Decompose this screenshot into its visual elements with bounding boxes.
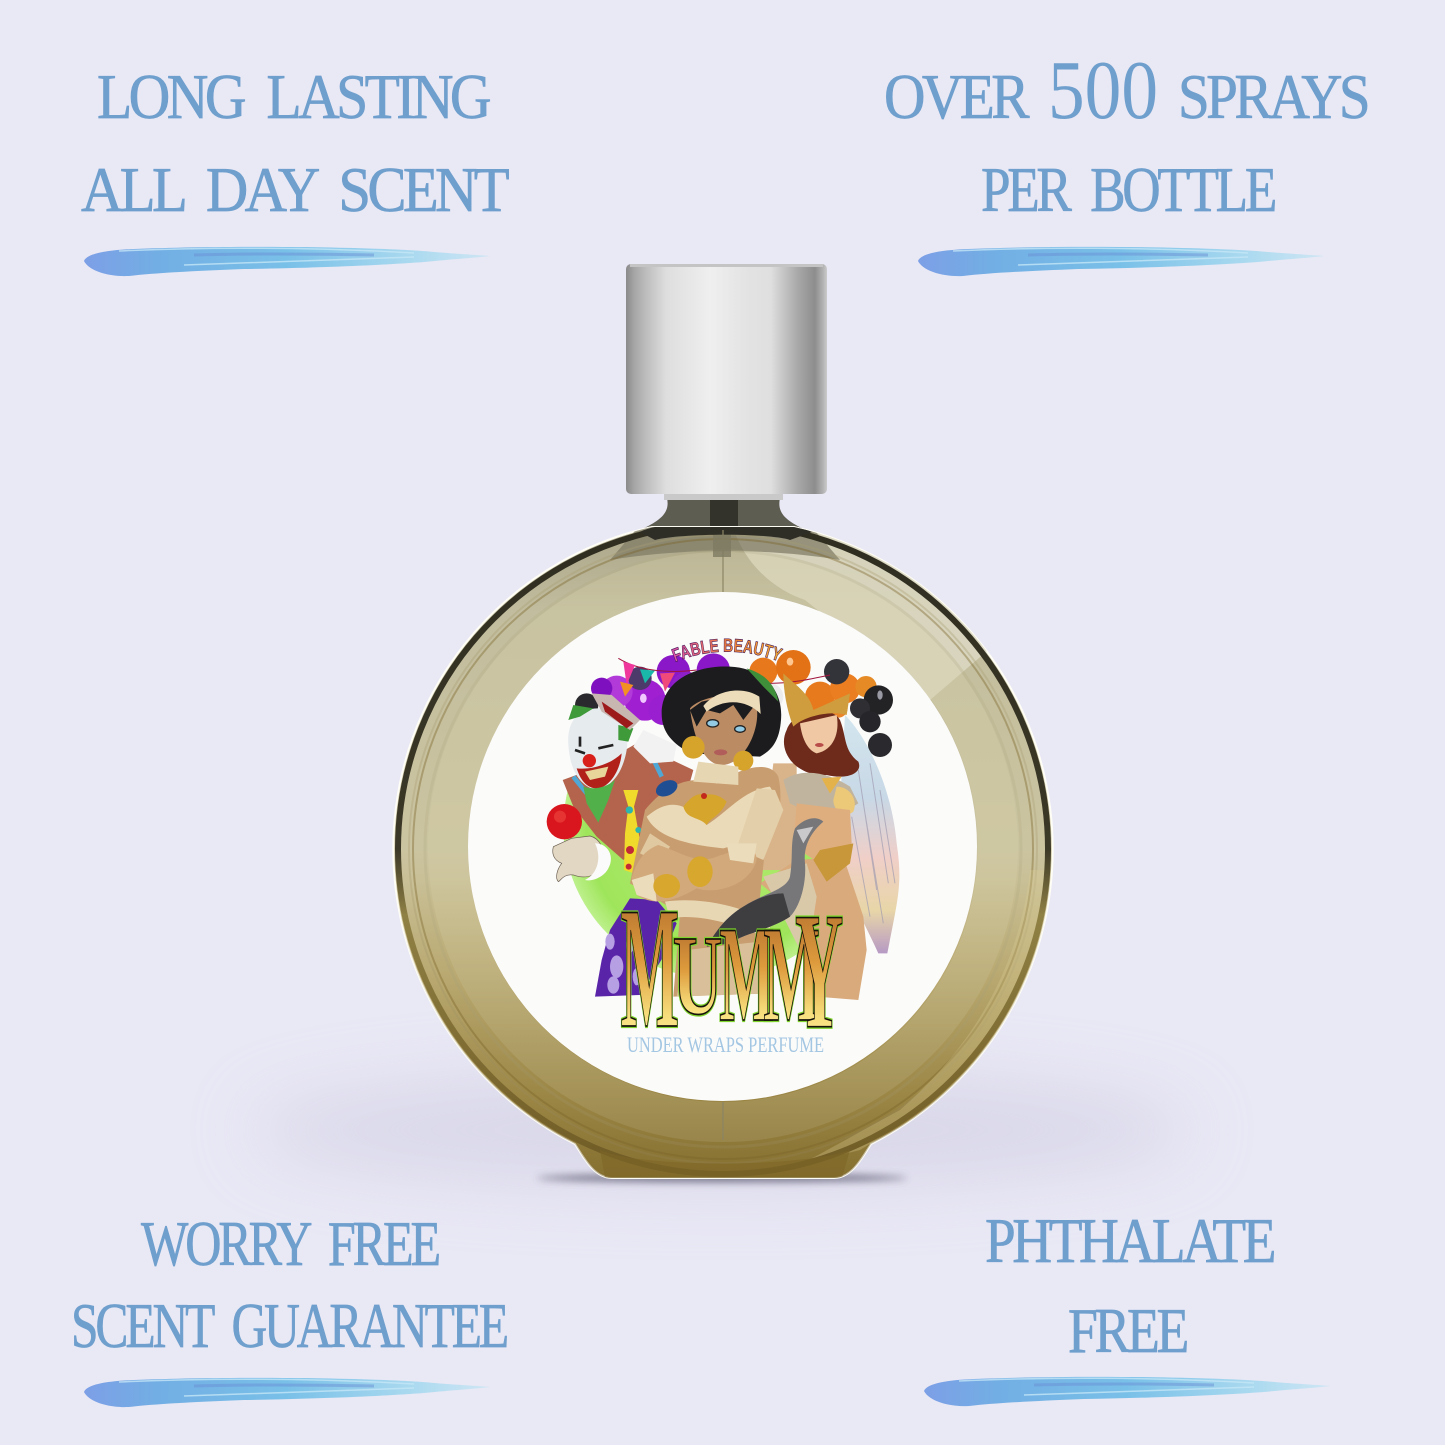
earrings (682, 736, 705, 759)
feature: worry free: SCENT GUARANTEE (71, 1290, 507, 1361)
bottle glass (380, 521, 1070, 1180)
beetle (653, 777, 680, 800)
feature: worry free (71, 1208, 507, 1407)
bangs (690, 695, 755, 727)
bust wraps (647, 787, 783, 848)
title letters: U (673, 912, 723, 1038)
title glow: M (621, 873, 679, 1064)
title: MUMMY (621, 873, 843, 1064)
feature: over 500 sprays: 500 (1048, 44, 1158, 137)
hand (553, 836, 604, 882)
belly wraps (665, 900, 770, 940)
legs (760, 857, 867, 1000)
feature: long lasting (81, 61, 510, 276)
head (568, 708, 627, 790)
title letters: M (763, 898, 820, 1050)
neck wrap (693, 762, 738, 785)
balloons (575, 650, 893, 757)
brush stroke (84, 1378, 490, 1407)
feature: over 500 sprays: SPRAYS (1178, 61, 1367, 132)
torso (630, 767, 780, 997)
brush stroke (84, 247, 490, 276)
jacket (563, 743, 693, 860)
feature: over 500 sprays: OVER (884, 61, 1030, 132)
feature: phthalate free: PHTHALATE (985, 1205, 1274, 1276)
brush stroke (918, 247, 1324, 276)
label illustration: Y (795, 879, 843, 1064)
nose (583, 754, 596, 767)
bracelets (687, 856, 713, 887)
feature: phthalate free: FREE (1068, 1295, 1187, 1366)
hair back (662, 667, 781, 757)
green circle background (564, 792, 813, 973)
torso (793, 803, 852, 863)
title glow: M (719, 898, 774, 1050)
ruffle collar (633, 730, 677, 763)
feature: long lasting: ALL DAY SCENT (81, 154, 510, 225)
clown (547, 693, 693, 997)
pants (595, 898, 677, 997)
armor (783, 773, 858, 820)
label illustration: Y (795, 879, 843, 1064)
hair (568, 705, 633, 742)
cobra (707, 818, 823, 947)
title letters: M (719, 898, 774, 1050)
dip tube (722, 530, 724, 1140)
lollipop (547, 804, 582, 839)
bottle cap (626, 264, 827, 494)
filler behind mummy (760, 763, 797, 870)
cleaver (592, 693, 640, 730)
brush stroke (924, 1377, 1330, 1406)
title letters: M (621, 873, 679, 1064)
mouth (577, 753, 622, 788)
label subtitle: UNDER WRAPS PERFUME (627, 1032, 824, 1057)
label illustration (546, 638, 900, 1064)
face (690, 696, 757, 765)
feature: over 500 sprays: PER BOTTLE (981, 154, 1275, 225)
gold scarab necklace (683, 794, 727, 825)
folded arms (632, 845, 757, 901)
floor shadow (252, 1075, 1192, 1185)
feature: phthalate free (924, 1205, 1330, 1406)
eyes (575, 737, 613, 753)
helmet (783, 673, 850, 727)
feature: over 500 sprays (884, 44, 1367, 276)
beard (583, 780, 615, 823)
bunting (618, 658, 830, 697)
perfume bottle (380, 264, 1070, 1180)
angel wings (760, 715, 899, 953)
tie (623, 790, 642, 873)
bottle neck (640, 494, 806, 530)
eyes (707, 720, 719, 727)
label disc (468, 592, 977, 1101)
lips (714, 749, 727, 755)
valkyrie (760, 673, 867, 1000)
face (800, 715, 837, 753)
hair (784, 711, 859, 777)
feature: worry free: WORRY FREE (141, 1208, 439, 1279)
headband (703, 691, 761, 714)
title glow: M (763, 898, 820, 1050)
upper arm wrap (737, 788, 783, 860)
title glow: U (673, 912, 723, 1038)
brand: FABLE BEAUTY: FABLE BEAUTY (671, 638, 784, 662)
mummy heroine (630, 667, 783, 997)
feature: long lasting: LONG LASTING (97, 61, 491, 132)
